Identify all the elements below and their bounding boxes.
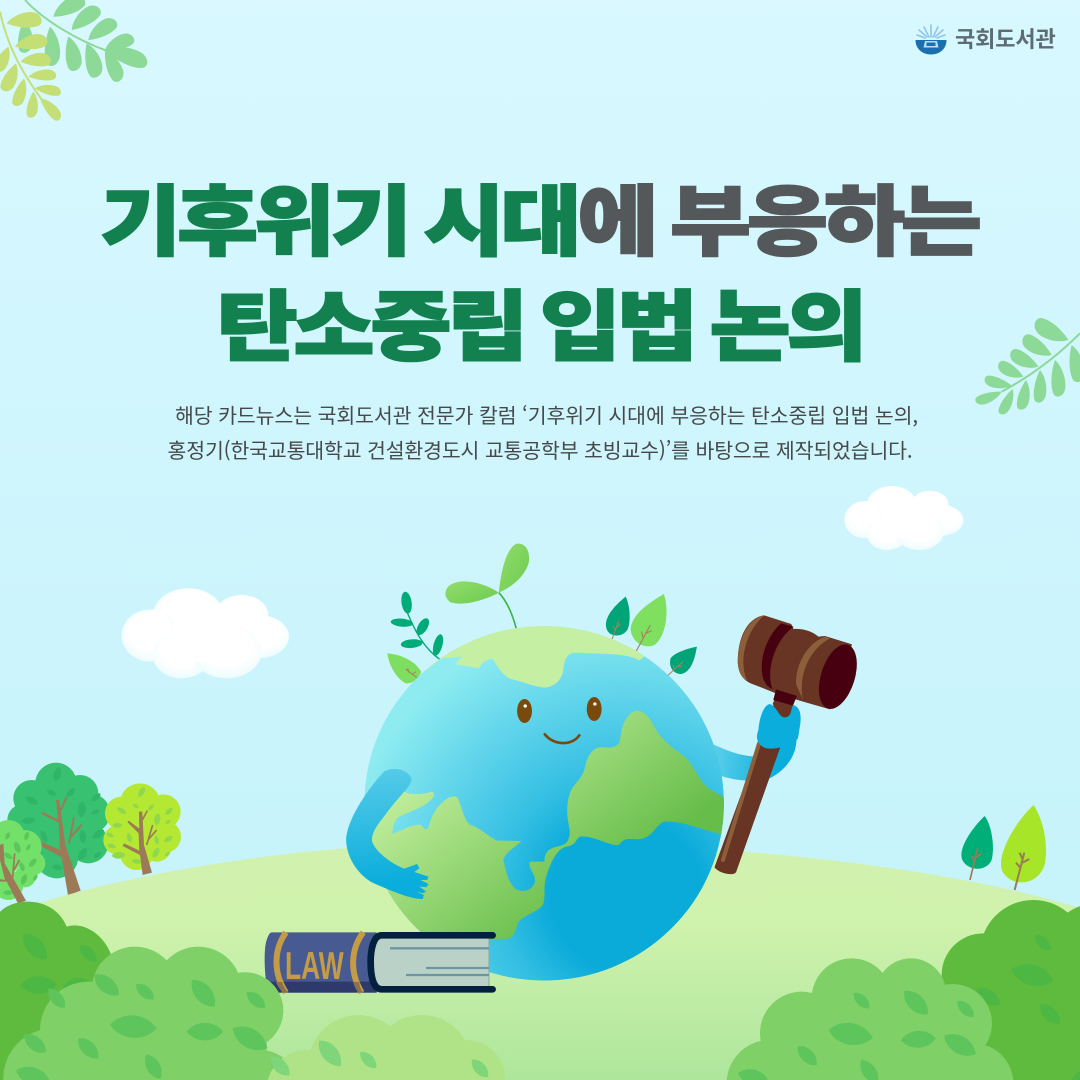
description line 1: 해당 카드뉴스는 국회도서관 전문가 칼럼 ‘기후위기 시대에 부응하는 탄소중립 입법 논의,	[175, 399, 918, 429]
branch: right foliage	[974, 315, 1080, 417]
gavel neck above the hand	[773, 689, 797, 717]
smile	[545, 734, 579, 743]
bush: back right	[942, 900, 1080, 1080]
right hand gripping gavel	[757, 704, 801, 749]
bush: front left	[3, 947, 298, 1080]
sapling: lime	[1001, 805, 1046, 890]
logo: National Assembly Library	[916, 25, 1056, 54]
gavel handle	[715, 703, 793, 874]
polar land	[424, 620, 644, 688]
trees: small leaf-shaped saplings on the right	[961, 805, 1046, 890]
character: earth globe with gavel	[346, 544, 864, 981]
tree: small light green	[0, 820, 45, 903]
logo wordmark: 국회도서관	[955, 27, 1056, 52]
leaf: left	[387, 653, 421, 683]
book spine	[265, 932, 377, 993]
book cover	[371, 935, 493, 989]
tree: dark green	[7, 763, 110, 895]
right arm	[711, 737, 796, 781]
tree: lime green	[103, 783, 181, 875]
title line 2: 탄소중립 입법 논의	[217, 265, 863, 376]
leaf: green top	[631, 594, 667, 652]
globe	[360, 620, 725, 981]
title	[100, 160, 980, 376]
small teal branch	[390, 591, 445, 659]
sprouts and leaves on top of the globe	[387, 544, 697, 683]
bush: front right	[727, 958, 1013, 1080]
eye left	[517, 699, 532, 723]
left arm hugging the globe	[346, 769, 429, 899]
book pages	[373, 936, 489, 989]
eye right	[587, 697, 602, 721]
book: LAW	[265, 932, 493, 993]
cloud: right	[844, 486, 964, 550]
face	[517, 697, 602, 743]
gavel	[715, 615, 864, 874]
leaf: small teal	[667, 647, 697, 676]
continents	[360, 711, 725, 943]
bush: center bottom	[266, 1015, 505, 1080]
sapling: teal	[961, 816, 993, 880]
gavel head	[738, 615, 864, 713]
bush: back left	[0, 902, 113, 1080]
description text	[168, 399, 918, 464]
hill	[0, 842, 1080, 1080]
leaf: teal top	[606, 597, 630, 640]
branches: top-left foliage	[0, 0, 150, 123]
cloud: left	[122, 588, 289, 678]
book label: LAW	[285, 944, 344, 988]
title line 1: 기후위기 시대에 부응하는	[100, 160, 980, 271]
ocean	[364, 626, 724, 981]
icon: open book emblem	[916, 25, 946, 54]
description line 2: 홍정기(한국교통대학교 건설환경도시 교통공학부 초빙교수)’를 바탕으로 제작되었습니다.	[168, 434, 912, 464]
sprout	[445, 544, 529, 629]
